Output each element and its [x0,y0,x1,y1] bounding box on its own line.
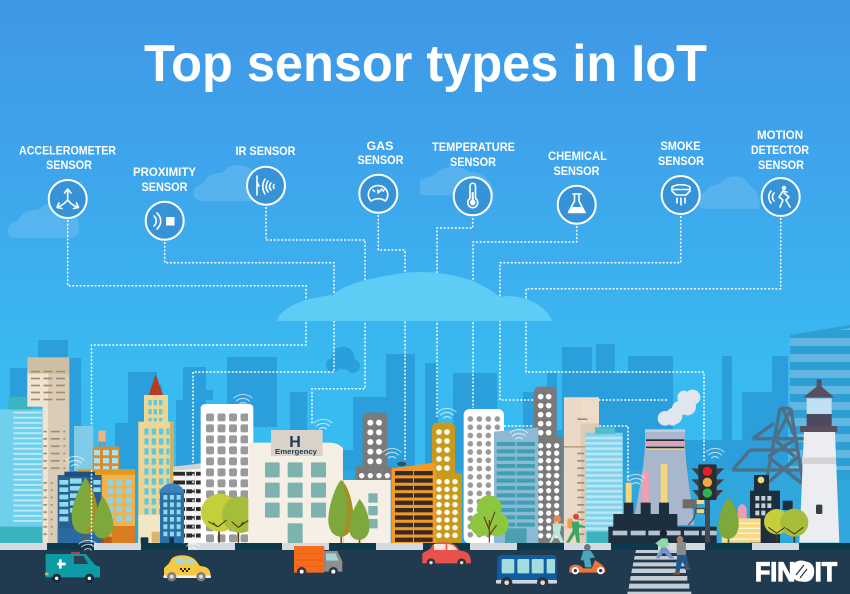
wifi signals [66,394,724,550]
beige tower east [564,397,599,543]
central IoT cloud [277,272,552,321]
sensor: smoke: SENSOR [658,154,704,168]
taxi [163,555,211,581]
sensor: proximity [133,165,196,240]
sensor: accelerometer [19,144,116,218]
sensor: temperature [432,140,515,215]
sensor: IR [236,144,296,205]
hospital sign: H [289,434,301,451]
smoke plume [658,390,700,426]
yellow circle-window tower [432,423,462,543]
dotted connector segments over buildings [92,470,193,545]
dark building with beacon [750,475,793,543]
red car [422,542,471,567]
small blue building [159,483,184,543]
crosswalk [627,550,691,594]
sensor: smoke [658,139,704,214]
factory [608,464,717,543]
striped building [173,463,207,543]
glass tower [0,397,43,543]
hospital [248,430,343,543]
sensor: IR: IR SENSOR [236,144,296,158]
sensor: accelerometer: SENSOR [46,158,92,172]
sensor: proximity: PROXIMITY [133,165,196,179]
gold clock tower [138,374,174,543]
scooter with rider [569,544,605,574]
vehicles [45,552,211,583]
buildings, centre district [328,387,563,543]
background skyline silhouettes [0,325,850,550]
glass tower east [586,427,623,543]
sensor: proximity: SENSOR [142,180,188,194]
round bushy tree [470,495,509,543]
sensor: chemical: CHEMICAL [548,149,607,163]
sensor: gas: SENSOR [358,153,404,167]
delivery truck [294,546,342,576]
ambulance [45,552,100,583]
yellow low block [722,504,761,543]
round trees by lighthouse [764,509,808,543]
pavement and road [0,543,850,594]
sensor: temperature: SENSOR [450,155,496,169]
traffic light with camera [683,464,724,543]
grey tower right [534,387,563,543]
dark blue building [58,472,102,543]
pale block [74,426,93,471]
pylon [733,408,805,488]
hospital sign [275,434,318,456]
pedestrians on pavement [549,514,585,543]
orange building [77,431,135,543]
grey circle-window tower [356,413,392,481]
lighthouse [799,379,839,543]
sensor: motion detector: DETECTOR [751,143,809,157]
hospital trees [328,480,369,543]
trees [72,477,113,543]
woman crossing [655,530,674,558]
beige tower [27,357,69,543]
hospital sign: Emergency [275,447,318,456]
white circle-window tower [464,409,504,543]
sensor: motion detector [751,128,809,216]
hospital windows [265,462,326,543]
cooling tower [633,429,694,525]
buildings, left district [0,357,259,543]
bus [496,555,557,588]
dotted connector lines behind the cloud [68,207,781,545]
man crossing [673,536,691,575]
buildings, east district [564,379,839,543]
twin round trees [201,494,259,543]
sensor: motion detector: MOTION [757,128,803,142]
FINOIT logo: FINOIT [755,557,837,587]
background clouds [8,165,760,238]
sensor: chemical: SENSOR [554,164,600,178]
white office tower [201,404,253,543]
sensor: chemical [548,149,607,224]
tall tree [718,497,739,543]
sensor: gas [358,139,404,213]
orange striped block [392,462,436,543]
sensor: motion detector: SENSOR [758,158,804,172]
distant striped tower [790,328,850,470]
sensor: gas: GAS [366,139,394,153]
sensor: smoke: SMOKE [660,139,700,153]
sensor: accelerometer: ACCELEROMETER [19,144,116,158]
title: Top sensor types in IoT [144,35,707,93]
sensor: temperature: TEMPERATURE [432,140,515,154]
low cream block [343,480,391,543]
blue glass block [494,427,538,543]
